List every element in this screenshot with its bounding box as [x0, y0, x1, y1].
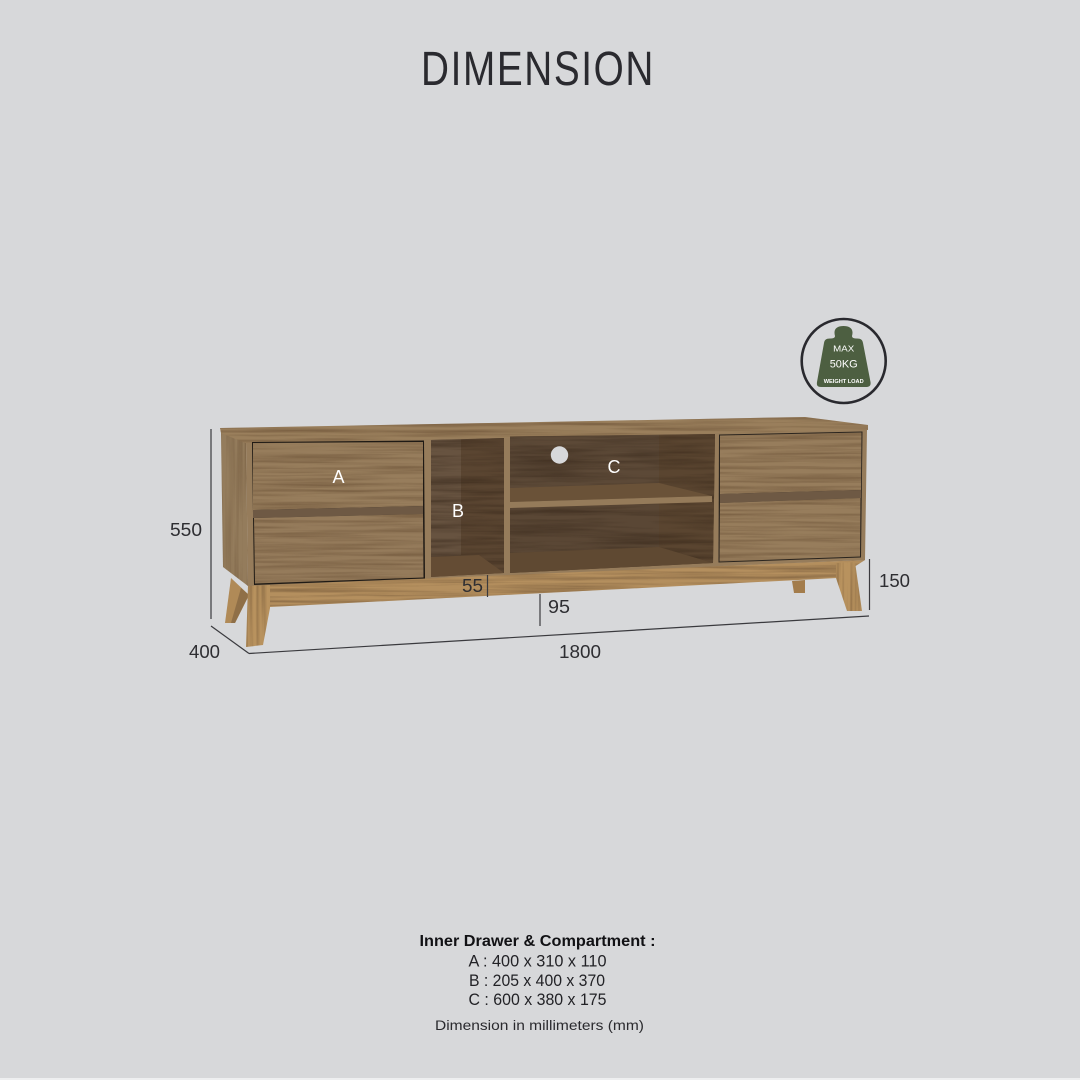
- left drawer: [252, 440, 425, 585]
- inner drawer and compartment sizes: B : 205 x 400 x 370: [469, 972, 605, 990]
- dimension lines: [211, 429, 870, 654]
- compartment letters: A: [332, 467, 345, 487]
- front right leg: [836, 562, 862, 611]
- dimension labels: 55: [462, 576, 483, 596]
- front left leg: [246, 585, 270, 647]
- icon: maximum weight load badge: [802, 319, 886, 403]
- front frame: [246, 429, 867, 586]
- side panel: [221, 432, 248, 586]
- dimension labels: 400: [189, 642, 220, 662]
- title: DIMENSION: [421, 43, 655, 96]
- cable hole: [551, 446, 568, 464]
- back legs: [225, 578, 805, 623]
- dimension labels: 1800: [559, 642, 601, 662]
- icon: maximum weight load badge: WEIGHT LOAD: [824, 379, 864, 385]
- right drawer: [718, 432, 862, 562]
- plinth rail: [247, 560, 865, 607]
- dimension labels: 95: [548, 597, 570, 617]
- compartment B: [431, 438, 504, 577]
- icon: maximum weight load badge: 50KG: [830, 358, 858, 370]
- dimension labels: [170, 520, 910, 662]
- dimension labels: 150: [879, 571, 910, 591]
- inner drawer and compartment sizes: C : 600 x 380 x 175: [468, 991, 606, 1009]
- top surface: [220, 417, 868, 443]
- compartment letters: C: [608, 457, 620, 477]
- dimension labels: 550: [170, 520, 202, 540]
- compartment letters: B: [452, 501, 464, 521]
- inner drawer and compartment sizes: A : 400 x 310 x 110: [468, 952, 606, 970]
- inner drawer and compartment sizes: Inner Drawer & Compartment :: [420, 933, 656, 950]
- compartment C: [510, 434, 715, 573]
- unit note: Dimension in millimeters (mm): [435, 1018, 644, 1033]
- compartment letters: [332, 457, 620, 521]
- shelf front edge: [510, 496, 712, 508]
- tv console illustration: [220, 417, 868, 647]
- inner drawer and compartment sizes: [420, 933, 656, 1009]
- icon: maximum weight load badge: MAX: [833, 344, 855, 354]
